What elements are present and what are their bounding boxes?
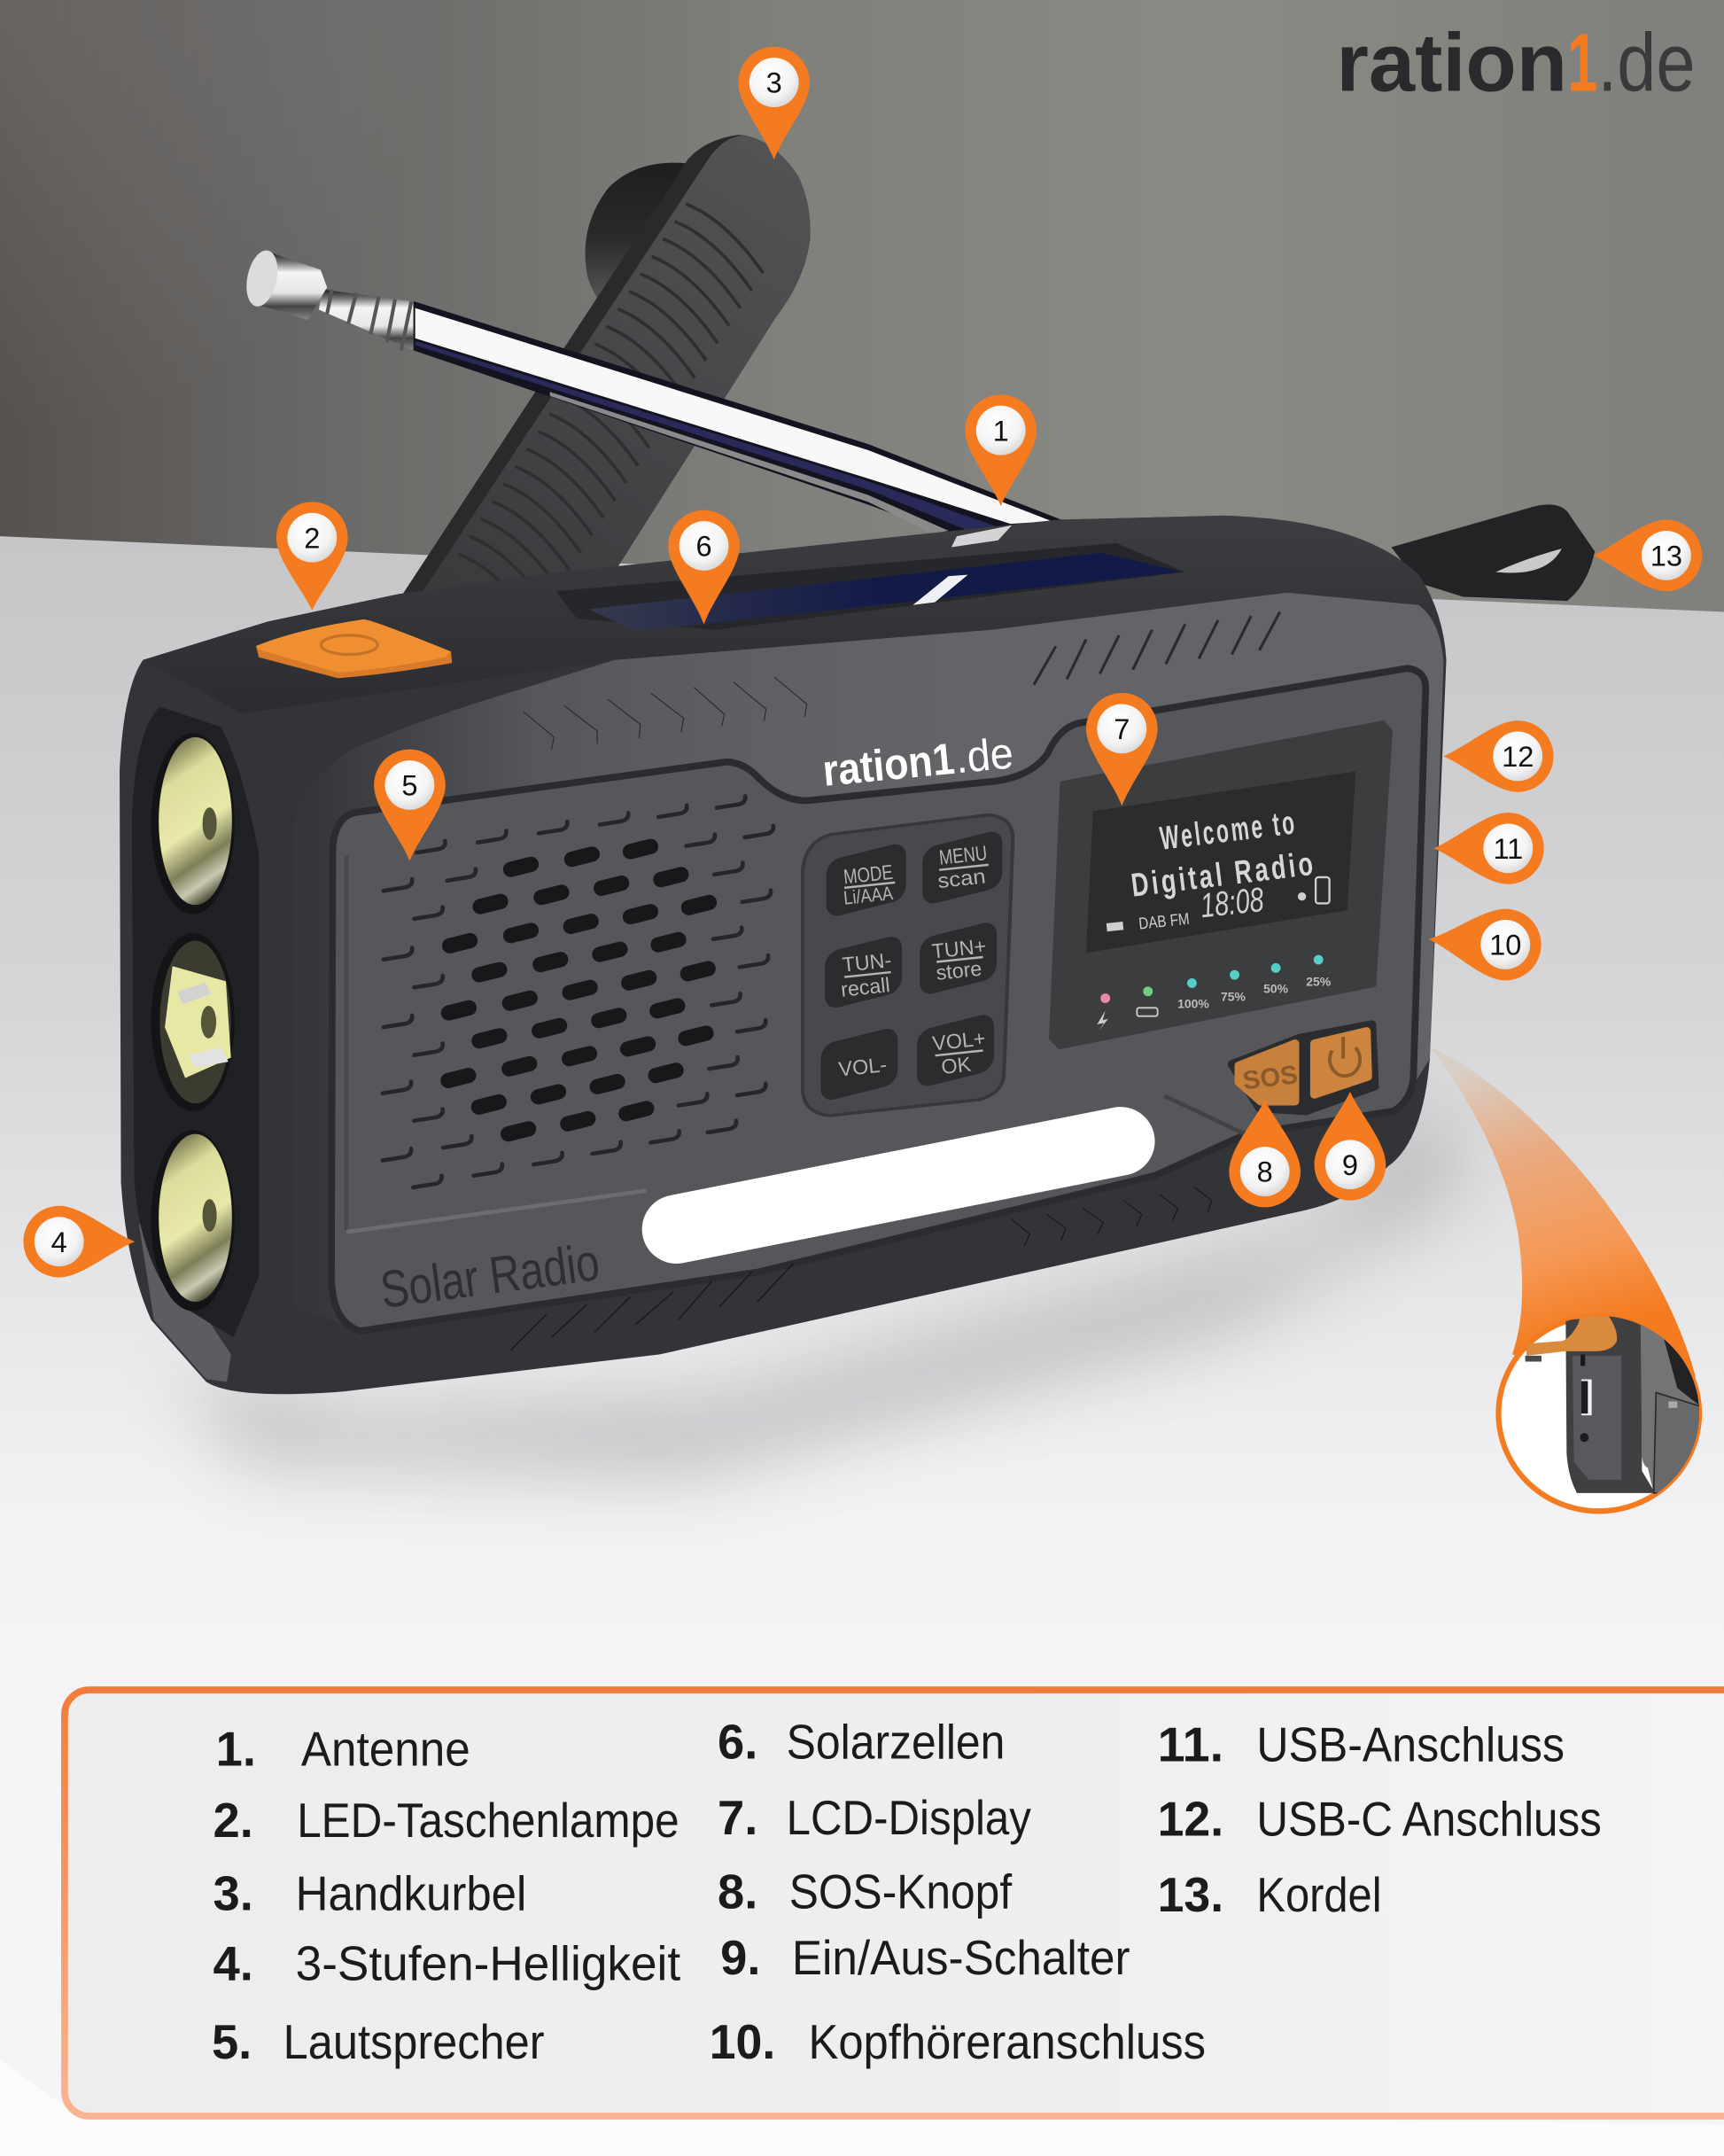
legend column 3: Kordel xyxy=(1256,1868,1382,1922)
LCD display: 18:08 xyxy=(1199,881,1266,925)
marker 4: 4 xyxy=(51,1226,67,1258)
marker 5 xyxy=(374,750,446,860)
legend column 1: 2. xyxy=(214,1794,253,1848)
marker 7: 7 xyxy=(1114,713,1130,745)
legend column 2 xyxy=(710,1716,1206,2069)
legend column 2: 8. xyxy=(718,1865,757,1919)
magnified side-view callout xyxy=(1430,1047,1707,1511)
light strip xyxy=(677,1141,1121,1229)
control buttons: VOL+ xyxy=(931,1026,987,1055)
radio floor shadow xyxy=(179,1100,1457,1471)
control buttons: scan xyxy=(936,865,987,892)
marker 8: 8 xyxy=(1257,1156,1273,1188)
control buttons: VOL- xyxy=(837,1053,888,1081)
radio brand logo: .de xyxy=(953,728,1015,782)
model name: Solar Radio xyxy=(377,1234,602,1319)
legend column 1: 4. xyxy=(214,1936,253,1990)
marker 10: 10 xyxy=(1489,930,1521,961)
marker 6 xyxy=(668,510,740,624)
marker 13: 13 xyxy=(1650,541,1682,572)
legend column 2: Kopfhöreranschluss xyxy=(808,2015,1206,2069)
USB ports side view xyxy=(1526,1313,1707,1493)
LCD display: Digital Radio xyxy=(1130,844,1318,904)
legend column 2: SOS-Knopf xyxy=(789,1865,1013,1919)
solar cells xyxy=(555,525,1185,631)
legend column 1: 5. xyxy=(212,2015,252,2069)
header logo: ration xyxy=(1336,16,1567,108)
legend column 2: 9. xyxy=(720,1931,760,1985)
marker 12: 12 xyxy=(1502,741,1534,773)
LCD display xyxy=(1052,723,1390,1047)
bottom chevrons xyxy=(511,1187,1212,1350)
flashlights xyxy=(132,706,259,1337)
marker 8 xyxy=(1229,1100,1301,1207)
orange LED flashlight button xyxy=(256,619,452,678)
marker 1 xyxy=(965,394,1037,506)
marker 5: 5 xyxy=(401,770,418,802)
marker 2 xyxy=(276,502,348,611)
legend column 3 xyxy=(1158,1718,1602,1922)
legend column 1: 3-Stufen-Helligkeit xyxy=(296,1936,680,1990)
status LEDs xyxy=(1097,955,1332,1031)
marker 6: 6 xyxy=(695,531,712,563)
marker 4 xyxy=(23,1206,135,1277)
LCD display: DAB FM xyxy=(1138,909,1191,933)
marker 1: 1 xyxy=(993,415,1009,447)
legend column 2: LCD-Display xyxy=(787,1791,1032,1845)
header logo: 1 xyxy=(1567,16,1597,108)
control buttons: recall xyxy=(840,973,891,1001)
control buttons: OK xyxy=(940,1053,973,1078)
control buttons: MENU xyxy=(938,841,988,869)
marker 11 xyxy=(1434,813,1544,884)
front panel xyxy=(331,668,1425,1331)
marker 11: 11 xyxy=(1493,833,1523,865)
marker 12 xyxy=(1443,720,1554,792)
marker 9: 9 xyxy=(1342,1149,1358,1181)
header logo xyxy=(1336,16,1695,108)
hand crank xyxy=(397,135,811,623)
legend column 1: Lautsprecher xyxy=(283,2015,545,2069)
SOS button: SOS xyxy=(1241,1060,1300,1095)
header logo: .de xyxy=(1597,16,1695,108)
legend column 2: 6. xyxy=(718,1716,757,1770)
legend column 1: Antenne xyxy=(301,1722,470,1776)
control buttons: store xyxy=(935,957,982,985)
LCD display: Welcome to xyxy=(1158,803,1299,857)
lens middle xyxy=(151,933,235,1111)
legend column 1: LED-Taschenlampe xyxy=(297,1794,680,1848)
legend column 3: 12. xyxy=(1158,1792,1223,1846)
marker 7 xyxy=(1086,693,1158,806)
marker 13 xyxy=(1594,520,1702,591)
SOS button xyxy=(1239,1044,1300,1101)
legend panel xyxy=(65,1690,1724,2116)
control buttons: TUN+ xyxy=(930,934,987,963)
control buttons xyxy=(803,815,1013,1116)
marker 3: 3 xyxy=(766,67,782,99)
marker 2: 2 xyxy=(304,522,320,554)
legend column 3: 13. xyxy=(1158,1868,1223,1922)
legend column 1: 1. xyxy=(216,1722,256,1776)
speaker grille xyxy=(383,796,773,1187)
legend column 1: 3. xyxy=(214,1866,253,1920)
marker 10 xyxy=(1426,904,1543,983)
power button xyxy=(1315,1031,1368,1094)
marker 9 xyxy=(1315,1092,1386,1201)
status LEDs: 50% xyxy=(1263,981,1289,995)
lens top xyxy=(151,733,235,915)
SOS and power buttons xyxy=(1231,1024,1375,1111)
status LEDs: 100% xyxy=(1177,996,1209,1010)
legend column 2: Ein/Aus-Schalter xyxy=(792,1931,1130,1985)
control buttons: TUN- xyxy=(841,948,892,977)
legend column 1 xyxy=(212,1722,680,2069)
antenna xyxy=(242,247,1061,533)
status LEDs: 75% xyxy=(1221,990,1246,1004)
lens bottom xyxy=(151,1130,235,1311)
legend column 3: USB-C Anschluss xyxy=(1256,1792,1602,1846)
top chevron ridges xyxy=(524,611,1280,750)
legend column 3: 11. xyxy=(1158,1718,1223,1772)
legend column 2: 7. xyxy=(718,1791,757,1845)
legend column 1: Handkurbel xyxy=(296,1866,526,1920)
legend column 2: 10. xyxy=(710,2015,775,2069)
radio body xyxy=(120,516,1447,1394)
marker 3 xyxy=(738,47,810,160)
legend column 2: Solarzellen xyxy=(787,1716,1005,1770)
radio brand logo: ration1 xyxy=(820,734,957,796)
control buttons: Li/AAA xyxy=(843,882,894,909)
control buttons: MODE xyxy=(843,860,894,889)
cord xyxy=(1391,504,1595,601)
status LEDs: 25% xyxy=(1306,975,1332,989)
legend column 3: USB-Anschluss xyxy=(1256,1718,1565,1772)
